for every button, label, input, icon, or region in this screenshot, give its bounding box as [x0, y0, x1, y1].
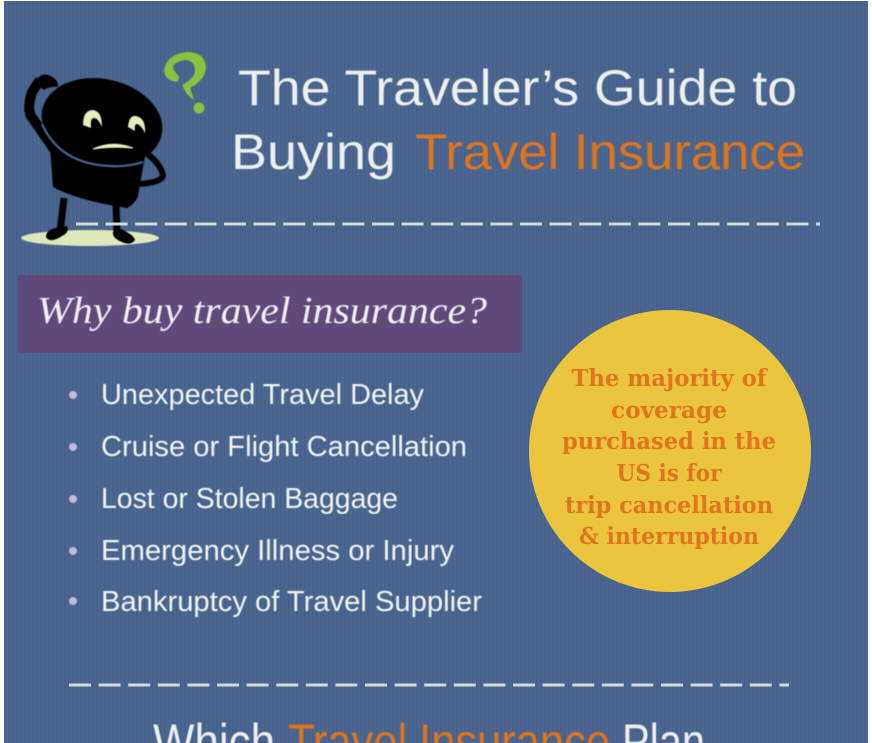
panel: why buy heading: [18, 275, 522, 353]
list item 4: Emergency Illness or Injury: [101, 535, 454, 567]
callout: majority of coverage: & interruption: [579, 523, 759, 550]
callout: majority of coverage: US is for: [616, 460, 722, 487]
callout: majority of coverage: coverage: [611, 397, 727, 424]
icon: question mark: [164, 52, 206, 114]
title: Travel Insurance: [415, 124, 805, 180]
character left arm: [29, 80, 58, 155]
character body: [50, 148, 145, 208]
list item 2: Cruise or Flight Cancellation: [101, 431, 467, 463]
title: Buying: [231, 124, 396, 180]
list: reasons to buy: [69, 379, 482, 618]
character fist: [35, 75, 58, 90]
callout: majority of coverage: purchased in the: [562, 428, 776, 455]
list item 3: Lost or Stolen Baggage: [101, 483, 398, 515]
character right eye: [128, 116, 145, 133]
character mouth: [93, 144, 133, 149]
character head: [33, 67, 171, 177]
character collar: [42, 124, 143, 166]
character right arm: [140, 153, 163, 184]
title: The Traveler’s Guide to: [238, 60, 797, 116]
list item 1: Unexpected Travel Delay: [101, 379, 424, 411]
callout: majority of coverage: trip cancellation: [565, 492, 773, 519]
icon: confused character: [21, 67, 171, 246]
list item 5: Bankruptcy of Travel Supplier: [101, 586, 482, 618]
title: [231, 60, 805, 180]
callout: majority of coverage: The majority of: [572, 365, 769, 392]
heading: which plan: [153, 714, 705, 743]
callout: majority of coverage: [529, 310, 811, 592]
character legs: [60, 198, 117, 232]
panel: why buy heading: Why buy travel insurance?: [37, 290, 487, 332]
character shadow: [21, 230, 159, 246]
character feet: [46, 226, 135, 244]
character left eye: [83, 110, 102, 128]
